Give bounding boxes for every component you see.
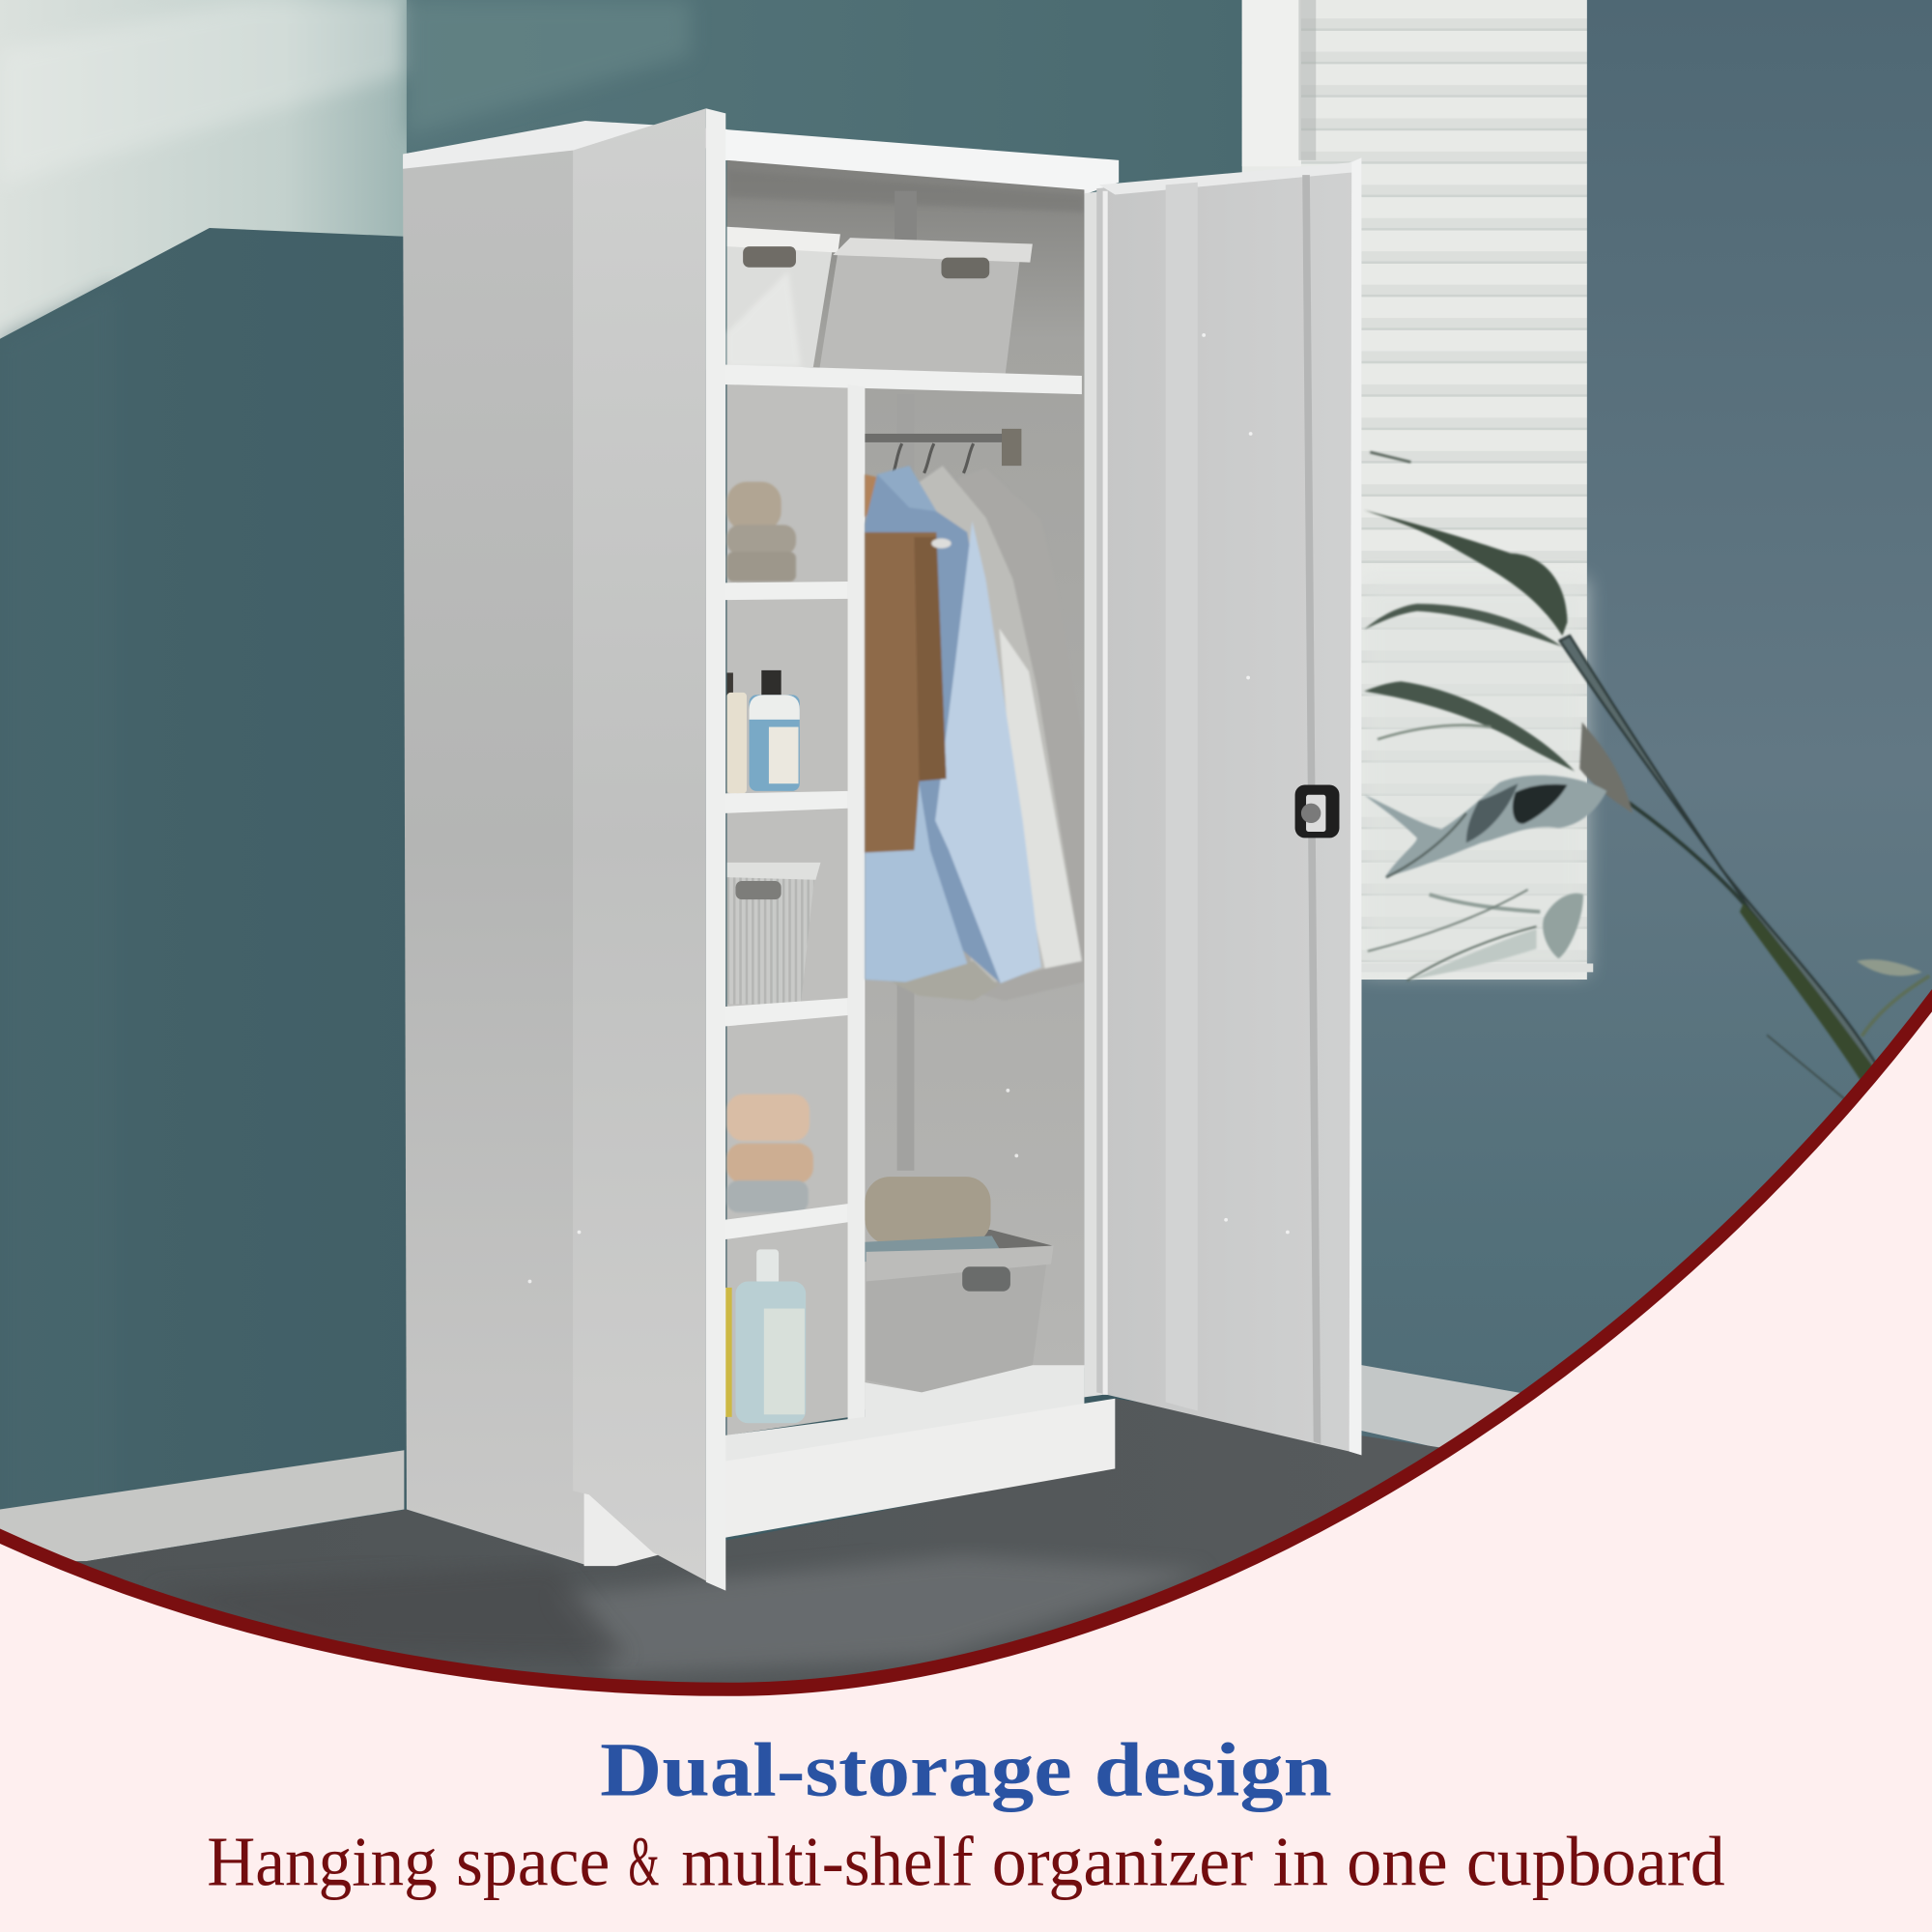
window with blinds xyxy=(1242,0,1593,980)
bottom storage bin with towels xyxy=(865,1177,1054,1392)
plant xyxy=(1364,452,1929,1104)
storage bin top left xyxy=(727,227,840,367)
grey shirt xyxy=(949,469,1100,1001)
shelf 5 xyxy=(724,1204,848,1239)
speckles xyxy=(528,333,1290,1283)
upper shelf xyxy=(724,365,1082,394)
main stems xyxy=(1560,636,1878,1082)
cabinet frame strip xyxy=(1084,191,1103,1397)
shelf 4 xyxy=(724,998,848,1026)
middle leaf xyxy=(1364,681,1575,771)
folded towels xyxy=(727,1094,813,1212)
door lock xyxy=(1295,784,1339,838)
left door xyxy=(573,108,725,1591)
storage bin top right xyxy=(819,238,1033,373)
spray bottle xyxy=(724,1249,806,1423)
subheading: space xyxy=(456,1823,610,1901)
hanging rail xyxy=(865,429,1021,473)
subheading: in xyxy=(1273,1823,1328,1901)
heading: Dual-storage xyxy=(600,1728,1072,1812)
interior shadow strip xyxy=(727,170,1084,212)
blue shirt xyxy=(865,466,1041,983)
trousers xyxy=(865,532,947,853)
subheading: cupboard xyxy=(1466,1823,1725,1901)
subheading: one xyxy=(1347,1823,1448,1901)
shelf items: bottles xyxy=(727,670,800,793)
shelf items: rolled towels xyxy=(727,482,796,582)
subheading: organizer xyxy=(992,1823,1253,1901)
shelf 3 xyxy=(724,791,848,813)
top leaf xyxy=(1364,510,1567,636)
subheading: Hanging xyxy=(207,1823,438,1901)
subheading: & xyxy=(629,1823,659,1901)
maroon curve border xyxy=(0,991,1932,1690)
small right leaf xyxy=(1857,959,1922,976)
curved bottom panel xyxy=(0,1001,1932,1932)
large pale leaf xyxy=(1364,775,1606,877)
woven basket xyxy=(727,863,820,1005)
interior back wall xyxy=(727,160,1084,1435)
right door xyxy=(1096,157,1361,1455)
off-white shirt xyxy=(918,466,1082,988)
cabinet floor and plinth xyxy=(724,1365,1115,1538)
left side panel xyxy=(403,124,585,1565)
shelf 2 xyxy=(724,582,848,600)
cupboard xyxy=(403,108,1361,1591)
subheading: multi-shelf xyxy=(681,1823,974,1901)
hanging clothes xyxy=(865,466,1100,1001)
lower leaves xyxy=(1543,894,1583,958)
top panel xyxy=(403,121,1119,195)
left compartment back xyxy=(727,382,850,1435)
orange hanger xyxy=(865,474,885,518)
vertical divider xyxy=(848,384,865,1419)
heading: design xyxy=(1094,1728,1332,1812)
